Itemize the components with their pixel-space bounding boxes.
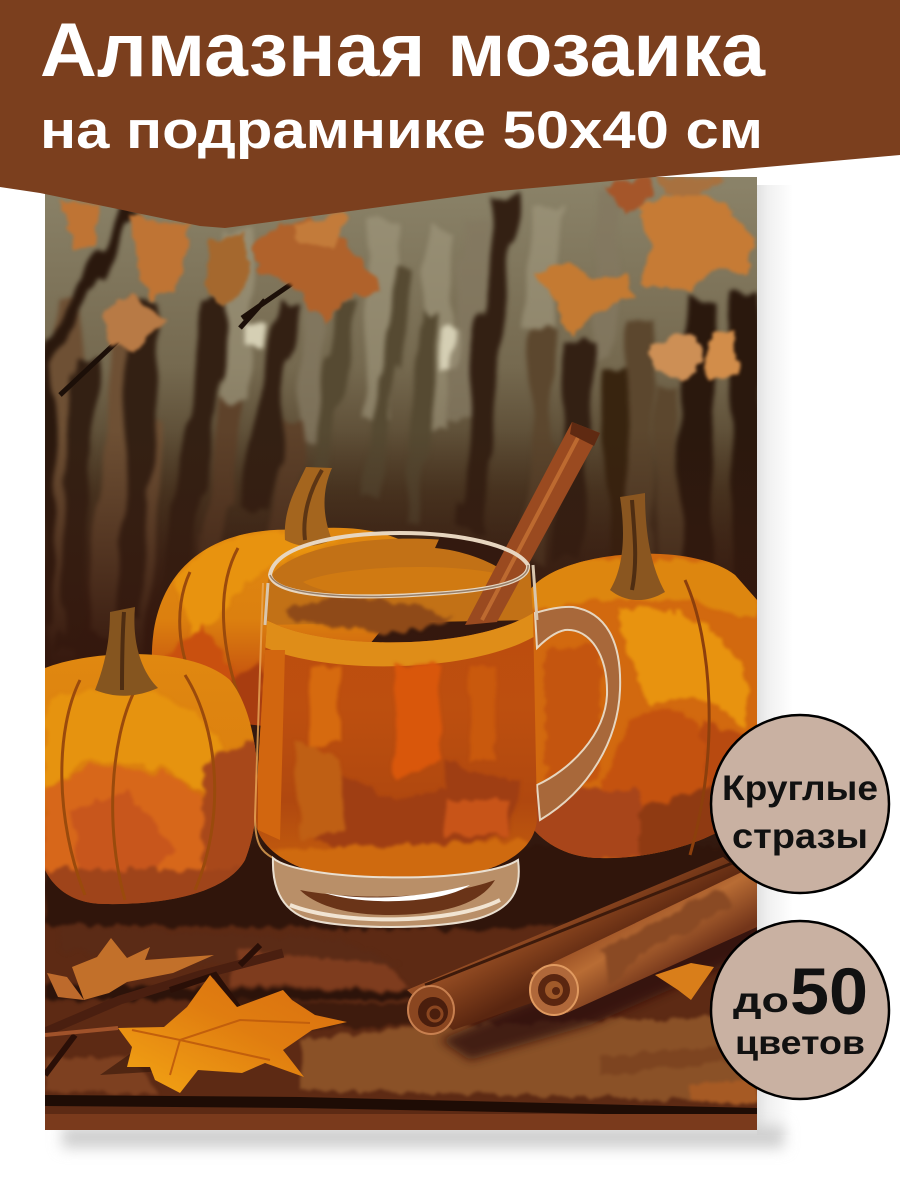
mug rim [270, 533, 528, 596]
painting background: forest [45, 177, 757, 850]
back stick [407, 857, 757, 1030]
badge: round rhinestones: Круглые [722, 769, 878, 808]
badge: up to 50 colours: цветов [735, 1024, 865, 1061]
title: Алмазная мозаика [40, 8, 766, 93]
pumpkin: back left [152, 467, 398, 726]
badge: up to 50 colours: 50 [790, 954, 868, 1028]
cinnamon stick in mug [465, 422, 600, 625]
stem [610, 493, 665, 600]
liquid body [255, 613, 537, 882]
badge: up to 50 colours [711, 921, 889, 1099]
subtitle: на подрамнике 50х40 см [40, 101, 763, 160]
stem [285, 467, 332, 546]
maple leaves [45, 938, 714, 1093]
leaf shadow and branch [45, 953, 283, 1032]
glass mug [255, 422, 620, 927]
canvas drop shadow [62, 185, 793, 1148]
wooden table [45, 845, 757, 1130]
mug handle [535, 607, 620, 820]
upper glass [264, 539, 533, 625]
front stick [531, 870, 757, 1013]
stem [95, 607, 158, 696]
badge: round rhinestones [711, 715, 889, 893]
header banner [0, 0, 900, 228]
glass base [273, 858, 519, 927]
cinnamon sticks on table [407, 857, 760, 1060]
pumpkin: back right [530, 493, 757, 860]
pumpkin: front left [45, 607, 260, 910]
autumn foliage [60, 178, 757, 380]
badge: round rhinestones: стразы [732, 817, 868, 856]
badge: up to 50 colours: до [733, 981, 789, 1020]
main maple leaf [118, 975, 347, 1093]
stick shadow [438, 927, 757, 1066]
canvas painting [45, 177, 760, 1130]
